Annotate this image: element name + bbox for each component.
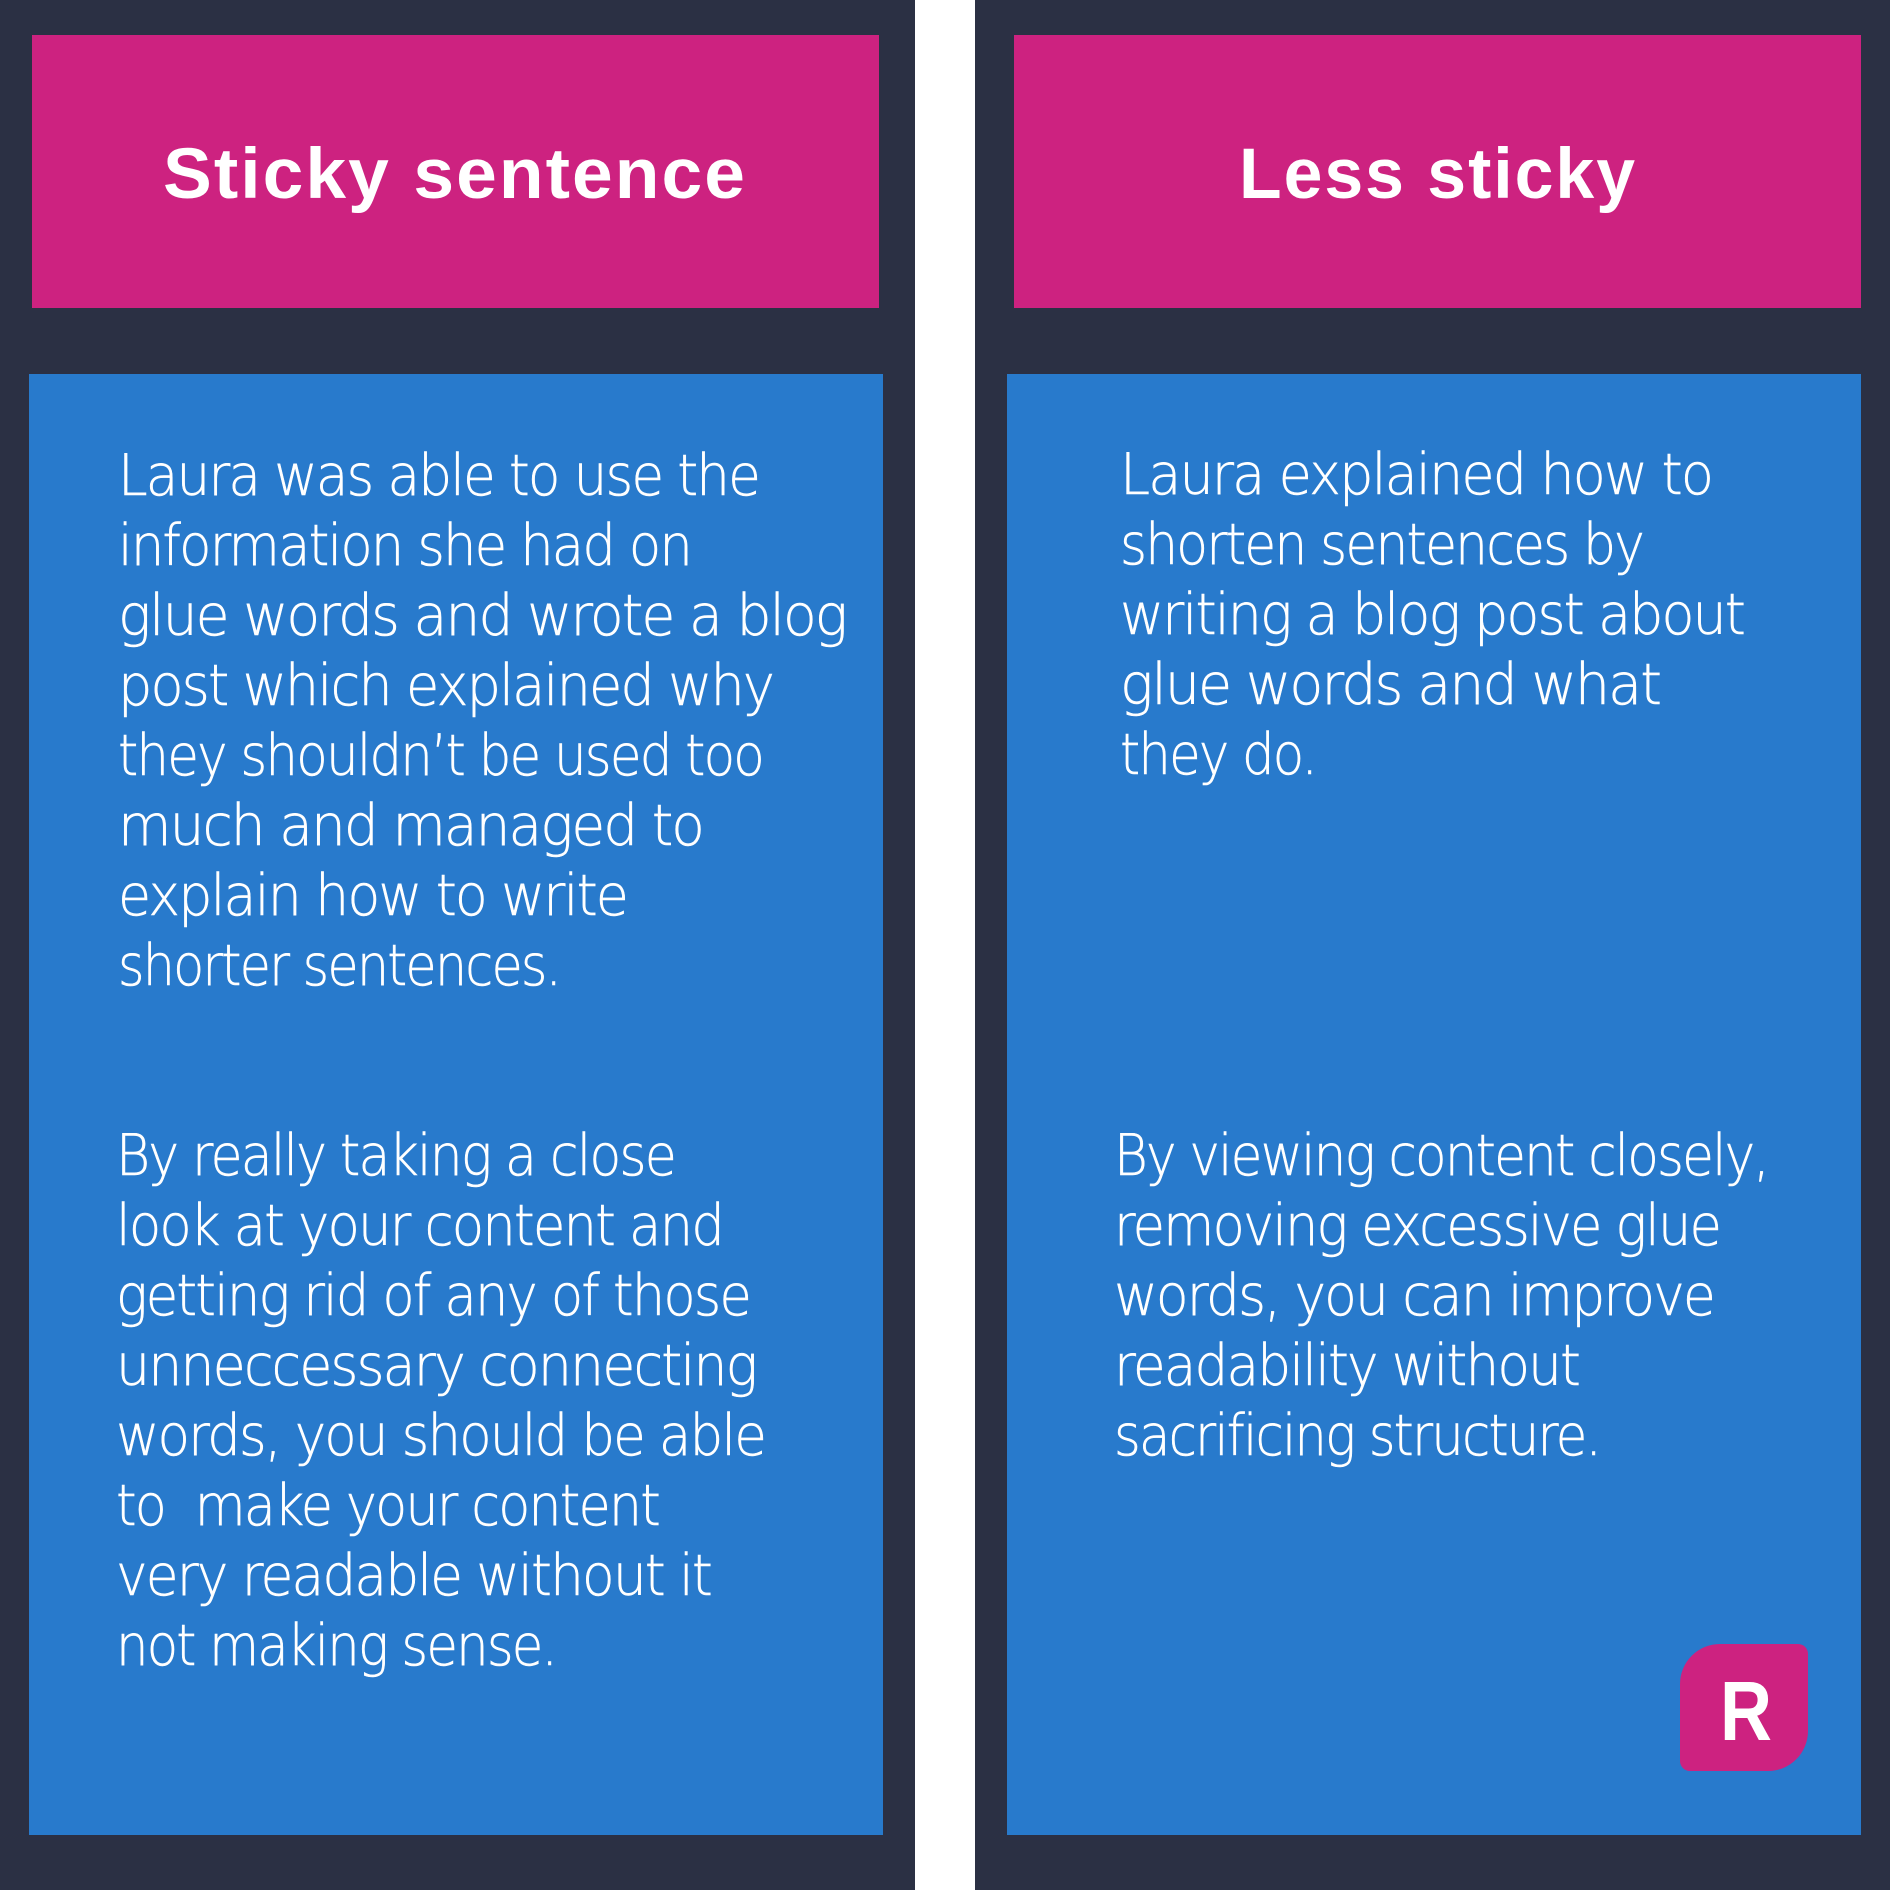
- text block: sticky explanation: to make your content: [116, 1473, 659, 1539]
- heading: Less sticky: [1014, 35, 1861, 308]
- text block: sticky example: much and managed to: [118, 793, 703, 859]
- text block: less sticky example: they do.: [1120, 722, 1316, 788]
- heading: Sticky sentence: Sticky sentence: [163, 135, 747, 214]
- text block: sticky example: explain how to write: [118, 863, 627, 929]
- text block: less sticky explanation: removing excessive glue: [1114, 1193, 1720, 1259]
- panel: less sticky body: [1007, 374, 1861, 1835]
- text block: sticky explanation: very readable without it: [116, 1543, 711, 1609]
- text block: sticky explanation: unneccessary connecting: [116, 1333, 756, 1399]
- panel: sticky sentence column: [0, 0, 915, 1890]
- text block: less sticky explanation: sacrificing structure.: [1114, 1403, 1600, 1469]
- text block: sticky explanation: [116, 1123, 765, 1679]
- text block: less sticky explanation: readability without: [1114, 1333, 1579, 1399]
- text block: sticky explanation: look at your content and: [116, 1193, 723, 1259]
- text block: sticky example: Laura was able to use the: [118, 443, 759, 509]
- icon: R logo: R: [1720, 1664, 1772, 1758]
- text block: less sticky explanation: words, you can improve: [1114, 1263, 1714, 1329]
- text block: less sticky example: writing a blog post about: [1120, 582, 1744, 648]
- text block: less sticky example: shorten sentences by: [1120, 512, 1643, 578]
- text block: sticky example: post which explained why: [118, 653, 773, 719]
- heading: Less sticky: Less sticky: [1239, 135, 1637, 214]
- panel: less sticky column: [975, 0, 1890, 1890]
- text block: sticky example: they shouldn’t be used too: [118, 723, 763, 789]
- text block: sticky example: shorter sentences.: [118, 933, 560, 999]
- text block: sticky explanation: words, you should be able: [116, 1403, 765, 1469]
- text block: less sticky explanation: [1114, 1123, 1768, 1469]
- text block: sticky explanation: By really taking a close: [116, 1123, 675, 1189]
- text block: less sticky explanation: By viewing content closely,: [1114, 1123, 1768, 1189]
- text block: sticky example: [118, 443, 846, 999]
- text block: less sticky example: glue words and what: [1120, 652, 1660, 718]
- icon: R logo: [1680, 1644, 1808, 1771]
- text block: less sticky example: [1120, 442, 1744, 788]
- text block: sticky example: glue words and wrote a blog: [118, 583, 846, 649]
- text block: less sticky example: Laura explained how to: [1120, 442, 1712, 508]
- text block: sticky explanation: not making sense.: [116, 1613, 556, 1679]
- panel: sticky sentence body: [29, 374, 883, 1835]
- text block: sticky example: information she had on: [118, 513, 691, 579]
- heading: Sticky sentence: [32, 35, 879, 308]
- text block: sticky explanation: getting rid of any of those: [116, 1263, 750, 1329]
